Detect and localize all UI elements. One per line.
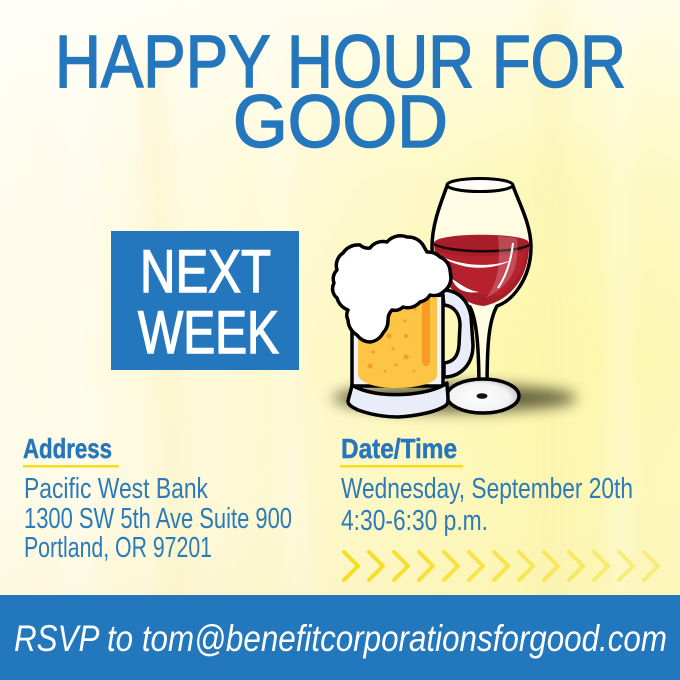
date lines: 4:30-6:30 p.m. — [341, 505, 488, 537]
date heading: Date/Time — [341, 433, 457, 464]
address lines: Portland, OR 97201 — [24, 532, 212, 564]
icon: wine glass — [432, 178, 531, 413]
icon: beer mug and wine glass — [333, 178, 577, 417]
address lines: Pacific West Bank — [24, 473, 208, 505]
address block — [23, 433, 292, 564]
address heading: Address — [23, 433, 112, 464]
address lines: 1300 SW 5th Ave Suite 900 — [24, 503, 292, 535]
date and time block — [340, 433, 633, 537]
next week badge — [111, 231, 299, 370]
address lines — [24, 473, 292, 564]
ground shadow — [333, 384, 577, 412]
title: GOOD — [233, 80, 448, 163]
chevron arrows — [344, 552, 658, 580]
icon: beer mug — [333, 236, 473, 417]
rsvp banner — [0, 595, 680, 680]
beer foam — [333, 236, 451, 342]
next week badge: WEEK — [138, 299, 279, 366]
title — [55, 20, 626, 163]
date lines — [341, 473, 633, 537]
mug handle — [442, 290, 473, 377]
next week badge: NEXT — [140, 238, 271, 305]
